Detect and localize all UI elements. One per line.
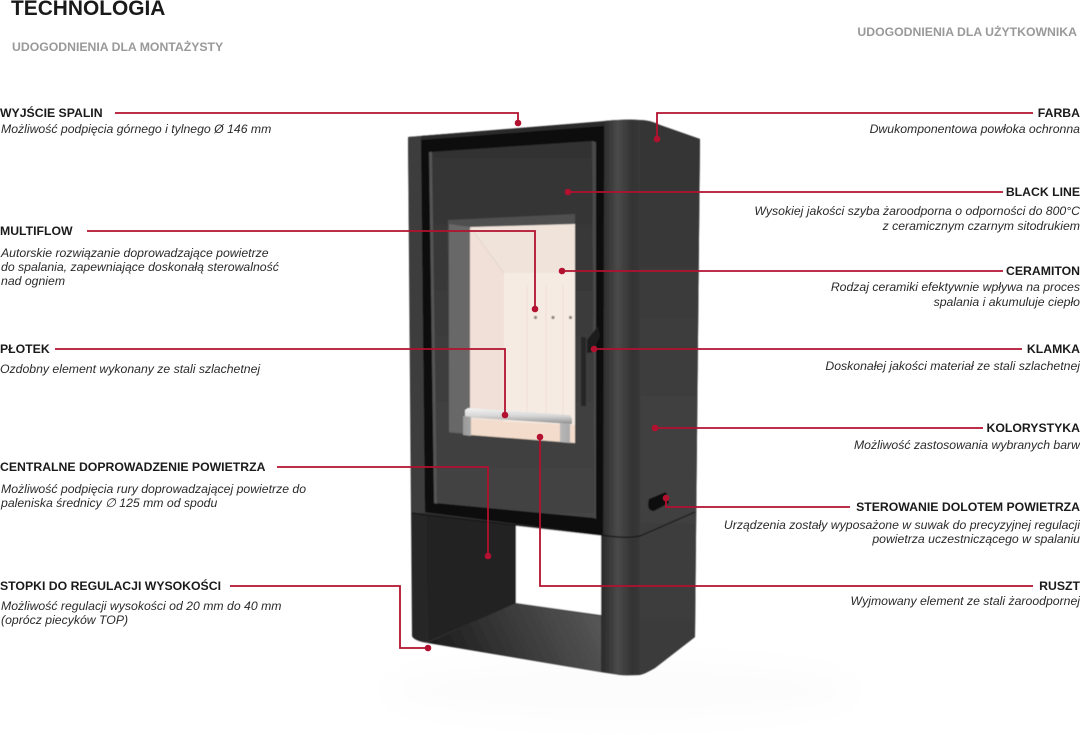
air control slider [648, 492, 669, 511]
callout: black line: z ceramicznym czarnym sitodrukiem [882, 219, 1080, 233]
callout: ceramiton: Rodzaj ceramiki efektywnie wpływa na proces [831, 280, 1080, 294]
glass left reflection [449, 224, 470, 434]
callout: płotek: Ozdobny element wykonany ze stali szlachetnej [0, 362, 260, 376]
callout: płotek: PŁOTEK [0, 342, 50, 356]
base floor [428, 603, 601, 672]
callout: stopki do regulacji wysokości: (oprócz piecyków TOP) [1, 613, 128, 627]
callout: płotek [0, 342, 508, 418]
right side panel [640, 120, 700, 675]
glass frame [448, 214, 575, 444]
callout: kolorystyka: KOLORYSTYKA [987, 421, 1080, 435]
stove body [408, 120, 700, 675]
callout: centralne doprowadzenie powietrza [0, 460, 491, 559]
firebox back wall [504, 273, 575, 425]
callout: sterowanie dolotem powietrza: Urządzenia zostały wyposażone w suwak do precyzyjnej regulacji [724, 518, 1080, 532]
floor shadow [380, 660, 860, 720]
frame recess [421, 122, 604, 535]
top trim [421, 122, 604, 140]
firebox ceiling [470, 224, 575, 273]
heading: user benefits: UDOGODNIENIA DLA UŻYTKOWNIKA [857, 24, 1077, 39]
handle [581, 337, 586, 406]
door left edge [429, 152, 437, 504]
callout: stopki do regulacji wysokości [0, 578, 431, 651]
callout: multiflow: Autorskie rozwiązanie doprowadzające powietrze [0, 246, 269, 260]
callout: ceramiton: CERAMITON [1006, 264, 1080, 278]
callout: ceramiton [559, 264, 1080, 309]
callout: black line [565, 185, 1080, 233]
stove illustration [408, 120, 700, 675]
callout: centralne doprowadzenie powietrza: CENTRALNE DOPROWADZENIE POWIETRZA [0, 460, 266, 474]
callout: ruszt: Wyjmowany element ze stali żaroodpornej [851, 594, 1080, 608]
rounded corner column [603, 120, 640, 675]
callout: multiflow: do spalania, zapewniające doskonałą sterowalność [1, 260, 280, 274]
callout: klamka [591, 342, 1080, 373]
base back panel [426, 515, 516, 641]
callout: wyjście spalin [0, 105, 521, 136]
base left post [412, 513, 427, 641]
left post [408, 136, 426, 513]
firebox lower area [470, 420, 575, 443]
callout: kolorystyka: Możliwość zastosowania wybranych barw [854, 438, 1080, 452]
callout: multiflow [0, 224, 538, 312]
grate legs [463, 416, 570, 443]
callout: farba: Dwukomponentowa powłoka ochronna [870, 122, 1080, 136]
callout: sterowanie dolotem powietrza [663, 495, 1080, 546]
callout: sterowanie dolotem powietrza: powietrza uczestniczącego w spalaniu [871, 532, 1080, 546]
callout: wyjście spalin: WYJŚCIE SPALIN [0, 105, 103, 120]
door panel [430, 141, 594, 518]
callout: klamka: Doskonałej jakości materiał ze stali szlachetnej [825, 359, 1080, 373]
base seam [412, 512, 695, 537]
callout: ruszt: RUSZT [1039, 579, 1080, 593]
callout: multiflow: nad ogniem [1, 274, 65, 288]
callout: wyjście spalin: Możliwość podpięcia górnego i tylnego Ø 146 mm [1, 122, 271, 136]
firebox back wall seams [527, 285, 563, 415]
callout: black line: BLACK LINE [1006, 185, 1080, 199]
callout: black line: Wysokiej jakości szyba żaroodporna o odporności do 800°C [754, 204, 1080, 218]
callout: farba [654, 106, 1080, 142]
grate bar [465, 408, 572, 424]
firebox left wall [470, 227, 504, 425]
callout: multiflow: MULTIFLOW [0, 224, 73, 238]
callout: klamka: KLAMKA [1027, 342, 1080, 356]
door right edge [592, 141, 596, 519]
handle bracket [587, 326, 600, 353]
base opening [516, 525, 601, 615]
heading: installer benefits: UDOGODNIENIA DLA MONTAŻYSTY [12, 39, 223, 54]
callout: sterowanie dolotem powietrza: STEROWANIE DOLOTEM POWIETRZA [856, 500, 1080, 514]
callout: farba: FARBA [1038, 106, 1080, 120]
callout: ruszt [537, 434, 1080, 608]
callout: centralne doprowadzenie powietrza: paleniska średnicy ∅ 125 mm od spodu [0, 496, 218, 510]
callout: stopki do regulacji wysokości: STOPKI DO REGULACJI WYSOKOŚCI [0, 578, 221, 593]
callout: kolorystyka [652, 421, 1080, 452]
firebox studs [534, 316, 572, 319]
callout: centralne doprowadzenie powietrza: Możliwość podpięcia rury doprowadzającej powietrze do [1, 482, 306, 496]
callout: stopki do regulacji wysokości: Możliwość regulacji wysokości od 20 mm do 40 mm [1, 599, 281, 613]
callout: ceramiton: spalania i akumuluje ciepło [934, 295, 1080, 309]
